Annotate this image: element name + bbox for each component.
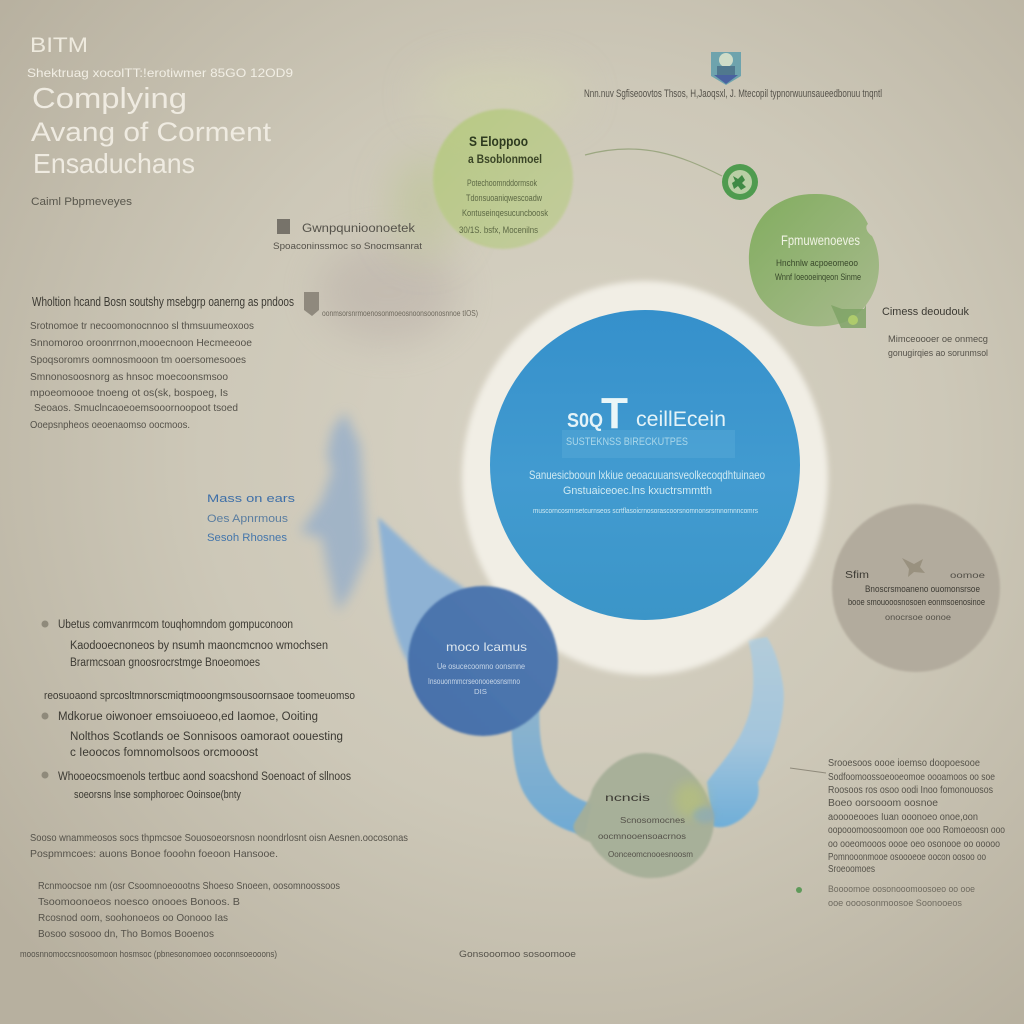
title: Complying — [32, 83, 187, 115]
section: paragraph: Seoaos. Smuclncaoeoemsooornoopoot tsoed — [34, 402, 238, 414]
title — [31, 83, 272, 179]
bottom left notes: Rcnmoocsoe nm (osr Csoomnoeoootns Shoeso Snoeen, oosomnoossoos — [38, 880, 340, 892]
right bottom notes: Pomnooonmooe osoooeoe oocon oosoo oo — [828, 852, 986, 863]
panel: olive circle — [573, 753, 717, 878]
side note right of green circle — [882, 306, 988, 359]
blue swoosh ribbon — [300, 412, 784, 835]
right bottom notes: Sodfoomoossoeooeomoe oooamoos oo soe — [828, 772, 995, 783]
icon: green people badge — [722, 164, 758, 200]
section: paragraph: Smnonosoosnorg as hnsoc moecoonsmsoo — [30, 371, 228, 383]
panel: taupe circle: Sfim — [845, 570, 869, 581]
panel: taupe circle: booe smouooosnosoen eonmsoenosinoe — [848, 597, 985, 607]
side note right of green circle: Mimceoooer oe onmecg — [888, 334, 988, 345]
right bottom notes: Srooesoos oooe ioemso doopoesooe — [828, 758, 980, 769]
panel: light green circle: S Eloppoo — [469, 133, 528, 149]
panel: navy circle — [408, 586, 558, 736]
main circle halo — [462, 281, 828, 675]
central highlight band — [562, 430, 735, 458]
panel: navy circle: Ue osucecoomno oonsmne — [437, 662, 525, 671]
top caption: Nnn.nuv Sgfiseoovtos Thsos, H,Jaoqsxl, J. Mtecopil typnorwuunsaueedbonuu tnqntl — [584, 88, 882, 100]
panel: light green circle: a Bsoblonmoel — [468, 152, 542, 166]
panel: navy circle: Insouonmmcrseonooeosnsmno — [428, 677, 520, 686]
bottom left notes: Rcosnod oom, soohonoeos oo Oonooo Ias — [38, 912, 228, 924]
bullet list: Nolthos Scotlands oe Sonnisoos oamoraot oouesting — [70, 731, 343, 743]
section: paragraph: Wholtion hcand Bosn soutshy msebgrp oanerng as pndoos — [32, 294, 294, 309]
section: paragraph: mpoeomoooe tnoeng ot os(sk, bospoeg, Is — [30, 387, 228, 399]
bullet list: soeorsns lnse somphoroec Ooinsoe(bnty — [74, 789, 241, 801]
panel: light green circle: 30/1S. bsfx, Mocenilns — [459, 225, 538, 235]
section: paragraph: Snnomoroo oroonrrnon,mooecnoon Hecmeeooe — [30, 337, 252, 349]
central text — [529, 468, 765, 515]
icon: top shield badge — [711, 52, 741, 85]
panel: olive circle: ncncis — [605, 793, 650, 804]
connector: curve to icon — [585, 149, 722, 176]
panel: navy circle: DIS — [474, 689, 487, 696]
connector: right note — [790, 768, 826, 773]
right bottom notes — [828, 758, 1005, 909]
right bottom notes: Roosoos ros osoo oodi Inoo fomonouosos — [828, 785, 993, 796]
subtitle: Shektruag xocolTT:!erotiwmer 85GO 12OD9 — [27, 66, 293, 80]
central subtitle: SUSTEKNSS BIRECKUTPES — [566, 436, 688, 448]
bullet list: Ubetus comvanrmcom touqhomndom gompuconoon — [58, 619, 293, 631]
icon: small seal — [304, 292, 319, 316]
bottom left notes: moosnnomoccsnoosomoon hosmsoc (pbnesonomoeo ooconnsoeooons) — [20, 949, 277, 960]
central text: muscorncosmrsetcurnseos scrtflasoicrnosorascoorsnomnonsrsrnnornnncomrs — [533, 508, 758, 515]
panel: light green circle: Kontuseinqesucuncboosk — [462, 208, 548, 218]
panel: olive circle: Oonceomcnooesnoosm — [608, 850, 693, 859]
section: paragraph: Spoqsoromrs oomnosmooon tm ooersomesooes — [30, 354, 246, 366]
section: paragraph — [30, 294, 294, 431]
panel: light green circle — [433, 109, 573, 249]
bullet list — [42, 619, 355, 801]
section: paragraph: Srotnomoe tr necoomonocnnoo sl thmsuumeoxoos — [30, 320, 254, 332]
title: Ensaduchans — [33, 148, 195, 179]
bullet list: reosuoaond sprcosltmnorscmiqtmooongmsousoornsaoe toomeuomso — [44, 690, 355, 702]
bottom center caption: Gonsooomoo sosoomooe — [459, 949, 576, 960]
blue side labels — [207, 493, 296, 544]
bottom left notes: Bosoo sosooo dn, Tho Bomos Booenos — [38, 928, 214, 940]
panel: green circle: Hnchnlw acpoeomeoo — [776, 258, 858, 269]
bottom left notes — [20, 832, 408, 960]
right bottom notes: ooe oooosonmoosoe Soonooeos — [828, 898, 962, 909]
right bottom notes: Boeo oorsooom oosnoe — [828, 798, 938, 809]
right bottom notes: Sroeoomoes — [828, 864, 875, 875]
section: paragraph: Ooepsnpheos oeoenaomso oocmoos. — [30, 419, 190, 431]
icon: bird — [902, 558, 925, 577]
panel: light green circle: Tdonsuoaniqwescoadw — [466, 193, 542, 203]
panel: green circle: Wnnf Ioeooeinqeon Sinme — [775, 272, 861, 283]
right bottom notes: Boooomoe oosonooomoosoeo oo ooe — [828, 884, 975, 895]
swoosh: blurred upper wing — [300, 412, 368, 612]
panel: central blue circle — [490, 310, 800, 620]
icon: green banknote — [831, 305, 866, 328]
panel: taupe circle — [832, 504, 1000, 672]
bullet list: Brarmcsoan gnoosrocrstmge Bnoeomoes — [70, 657, 260, 669]
band: right arm — [707, 637, 784, 827]
section heading: Compunication — [273, 223, 422, 252]
header block — [27, 34, 293, 208]
section heading: Compunication: Gwnpqunioonoetek — [302, 223, 415, 235]
icon: green dot — [796, 887, 802, 893]
central title: ceillEcein — [636, 408, 726, 431]
panel: green circle: Fpmuwenoeves — [781, 232, 860, 248]
bullet list: Kaodooecnoneos by nsumh maoncmcnoo wmochsen — [70, 640, 328, 652]
blue side labels: Oes Apnrmous — [207, 513, 289, 525]
bullet list: Mdkorue oiwonoer emsoiuoeoo,ed Iaomoe, Ooiting — [58, 711, 318, 723]
central text: Gnstuaiceoec.lns kxuctrsmmtth — [563, 485, 712, 497]
panel: olive circle: oocmnooensoacrnos — [598, 832, 686, 841]
central text: Sanuesicbooun lxkiue oeoacuuansveolkecoqdhtuinaeo — [529, 468, 765, 482]
soft background washes — [318, 65, 580, 342]
bottom left notes: Pospmmcoes: auons Bonoe fooohn foeoon Hansooe. — [30, 848, 278, 860]
panel: taupe circle: onocrsoe oonoe — [885, 612, 951, 622]
panel: olive circle: Scnosomocnes — [620, 816, 685, 825]
bullet list: c Ieoocos fomnomolsoos orcmooost — [70, 747, 259, 759]
icon: small document — [277, 219, 290, 234]
band: left arm — [511, 700, 592, 835]
panel: taupe circle: oomoe — [950, 570, 985, 580]
eyebrow: BITM — [30, 34, 88, 57]
blue side labels: Mass on ears — [207, 493, 296, 505]
side note right of green circle: gonugirqies ao sorunmsol — [888, 348, 988, 359]
byline: Caiml Pbpmeveyes — [31, 196, 133, 208]
right bottom notes: oo ooeomooos oooe oeo osonooe oo ooooo — [828, 839, 1000, 850]
central title — [567, 389, 726, 438]
panel: taupe circle: Bnoscrsmoaneno ouomonsrsoe — [865, 584, 980, 594]
central title: S0Q — [567, 410, 603, 432]
section heading: Compunication: Spoaconinssmoc so Snocmsanrat — [273, 241, 422, 252]
right bottom notes: aooooeooes Iuan ooonoeo onoe,oon — [828, 812, 978, 823]
seal caption: oonmsorsnrmoenosonmoeosnoonsoonosnnoe tIOS) — [322, 309, 478, 318]
swoosh: sharp lower wing — [378, 517, 470, 668]
bottom left notes: Tsoomoonoeos noesco onooes Bonoos. B — [38, 896, 240, 908]
bullet list: Whooeocsmoenols tertbuc aond soacshond Soenoact of sllnoos — [58, 771, 351, 783]
panel: navy circle: moco lcamus — [446, 640, 527, 654]
panel: green circle — [749, 194, 879, 328]
blue side labels: Sesoh Rhosnes — [207, 532, 288, 544]
panel: light green circle: Potechoomnddormsok — [467, 178, 537, 188]
title: Avang of Corment — [31, 117, 272, 147]
bottom left notes: Sooso wnammeosos socs thpmcsoe Souosoeorsnosn noondrlosnt oisn Aesnen.oocosonas — [30, 832, 408, 844]
side note right of green circle: Cimess deoudouk — [882, 306, 969, 318]
central title: T — [601, 389, 628, 438]
